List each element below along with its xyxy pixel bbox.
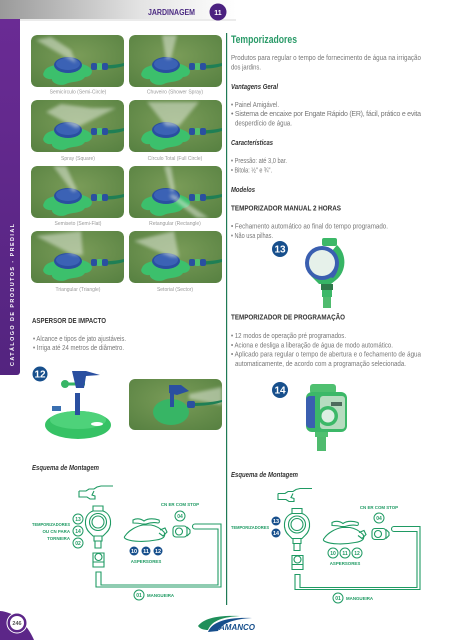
- panel: temporizadores text: desperdício de água.: [235, 120, 292, 128]
- assembly diagram right: 13: [273, 519, 279, 525]
- impact sprinkler text block: [32, 318, 126, 352]
- product: impact sprinkler: [45, 371, 111, 439]
- captions: Semicírculo (Semi-Circle): [50, 90, 107, 96]
- divider: [226, 33, 227, 605]
- assembly diagram left: ASPERSORES: [131, 559, 161, 564]
- badge 13: [272, 241, 288, 257]
- captions: [50, 90, 203, 293]
- logo: Amanco: AMANCO: [218, 623, 256, 632]
- captions: Setorial (Sector): [157, 287, 193, 293]
- panel: temporizadores text: Produtos para regular o tempo de fornecimento de água na irrigação: [231, 55, 421, 62]
- assembly diagram right: CN ER COM STOP: [360, 505, 398, 510]
- impact sprinkler text block: • Irriga até 24 metros de diâmetro.: [33, 345, 124, 352]
- panel: temporizador de programacao text: automaticamente, de acordo com a programação selecionada.: [235, 361, 406, 368]
- panel: temporizadores text: Características: [231, 140, 273, 147]
- assembly diagram left: 01: [136, 593, 142, 599]
- captions: Círculo Total (Full Circle): [148, 156, 203, 162]
- assembly diagram left: TORNEIRA: [47, 536, 71, 541]
- photo grid: sprinkler modes: [31, 35, 222, 293]
- side band: catalogue label: CATÁLOGO DE PRODUTOS - PREDIAL: [9, 223, 16, 366]
- logo: Amanco: [198, 616, 256, 632]
- photo: sector: [129, 231, 222, 283]
- panel: temporizador de programacao text: • Aplicado para regular o tempo de abertura e o fechamento de água: [231, 352, 421, 358]
- assembly diagram right: 01: [335, 596, 341, 602]
- assembly diagram right: ASPERSORES: [330, 561, 360, 566]
- badge 14: 14: [274, 386, 286, 396]
- assembly diagram left: 11: [143, 549, 149, 555]
- impact sprinkler text block: ASPERSOR DE IMPACTO: [32, 318, 106, 325]
- panel: temporizador de programacao text: • 12 modos de operação pré programados.: [231, 333, 346, 340]
- badge 13: 13: [274, 244, 286, 256]
- page header band: [0, 0, 236, 21]
- panel: temporizadores text: • Painel Amigável.: [231, 102, 279, 109]
- page number corner: [0, 611, 34, 640]
- badge 12: [32, 366, 48, 382]
- page number corner: 246: [12, 621, 22, 627]
- assembly diagram left: 12: [155, 549, 161, 555]
- captions: Triangular (Triangle): [56, 287, 101, 293]
- photo: rectangle: [129, 166, 222, 218]
- captions: Chuveiro (Shower Spray): [147, 90, 203, 96]
- assembly diagram left: [32, 486, 221, 600]
- assembly diagram left: 14: [75, 529, 81, 535]
- captions: Spray (Square): [61, 156, 95, 162]
- panel: temporizador de programacao text: [231, 312, 421, 368]
- panel: temporizadores text: • Sistema de encaixe por Engate Rápido (ER), fácil, prático e evita: [231, 111, 421, 118]
- heading: esquema de montagem left: Esquema de Montagem: [32, 465, 99, 472]
- assembly diagram right: TEMPORIZADORES: [231, 525, 269, 530]
- assembly diagram right: 14: [273, 531, 280, 537]
- photo: semi-flat: [31, 166, 124, 218]
- assembly diagram right: MANGUEIRA: [346, 596, 374, 601]
- panel: temporizadores text: Vantagens Geral: [231, 84, 279, 91]
- assembly diagram left: 10: [131, 549, 137, 555]
- section title: JARDINAGEM: [148, 8, 195, 17]
- assembly diagram left: MANGUEIRA: [147, 593, 175, 598]
- product: programmable timer: [306, 384, 347, 451]
- assembly diagram right: 10: [330, 551, 336, 557]
- photo: impact sprinkler in use: [129, 379, 222, 430]
- panel: temporizadores text: • Não usa pilhas.: [231, 233, 273, 240]
- assembly diagram left: CN ER COM STOP: [161, 502, 199, 507]
- panel: temporizadores text: dos jardins.: [231, 64, 261, 72]
- section number badge: 11: [214, 10, 222, 17]
- photo: semi-circle: [31, 35, 124, 87]
- assembly diagram right: [231, 488, 420, 603]
- assembly diagram left: 04: [177, 514, 183, 520]
- product: manual timer: [305, 238, 344, 308]
- assembly diagram left: 13: [75, 517, 81, 523]
- photo: triangle: [31, 231, 124, 283]
- photo: full circle: [129, 100, 222, 152]
- photo: spray square: [31, 100, 124, 152]
- assembly diagram left: TEMPORIZADORES: [32, 522, 70, 527]
- captions: Semiseto (Semi-Flat): [55, 221, 102, 227]
- assembly diagram left: 02: [75, 541, 81, 547]
- panel: temporizadores text: • Pressão: até 3,0 bar.: [231, 158, 287, 165]
- photo: shower spray: [129, 35, 222, 87]
- panel: temporizador de programacao text: TEMPORIZADOR DE PROGRAMAÇÃO: [231, 312, 345, 322]
- panel: temporizadores text: [231, 34, 421, 240]
- impact sprinkler text block: • Alcance e tipos de jato ajustáveis.: [33, 336, 126, 343]
- panel: temporizadores text: TEMPORIZADOR MANUAL 2 HORAS: [231, 206, 341, 212]
- section number badge: [210, 4, 226, 20]
- panel: temporizadores text: Modelos: [231, 187, 255, 194]
- assembly diagram right: 04: [376, 516, 382, 522]
- assembly diagram right: 12: [354, 551, 360, 557]
- panel: temporizadores text: • Bitola: ½" e ¾".: [231, 166, 272, 174]
- heading: esquema de montagem right: Esquema de Montagem: [231, 472, 298, 479]
- panel: temporizador de programacao text: • Aciona e desliga a liberação de água de modo automático.: [231, 342, 393, 350]
- captions: Retangular (Rectangle): [149, 221, 201, 227]
- panel: temporizadores text: • Fechamento automático ao final do tempo programado.: [231, 224, 388, 230]
- assembly diagram right: 11: [342, 551, 348, 557]
- side band: catalogue label: [0, 19, 20, 375]
- panel: temporizadores text: Temporizadores: [231, 34, 297, 46]
- badge 12: 12: [34, 370, 46, 380]
- assembly diagram left: OU CN PARA: [43, 529, 71, 534]
- badge 14: [272, 382, 288, 398]
